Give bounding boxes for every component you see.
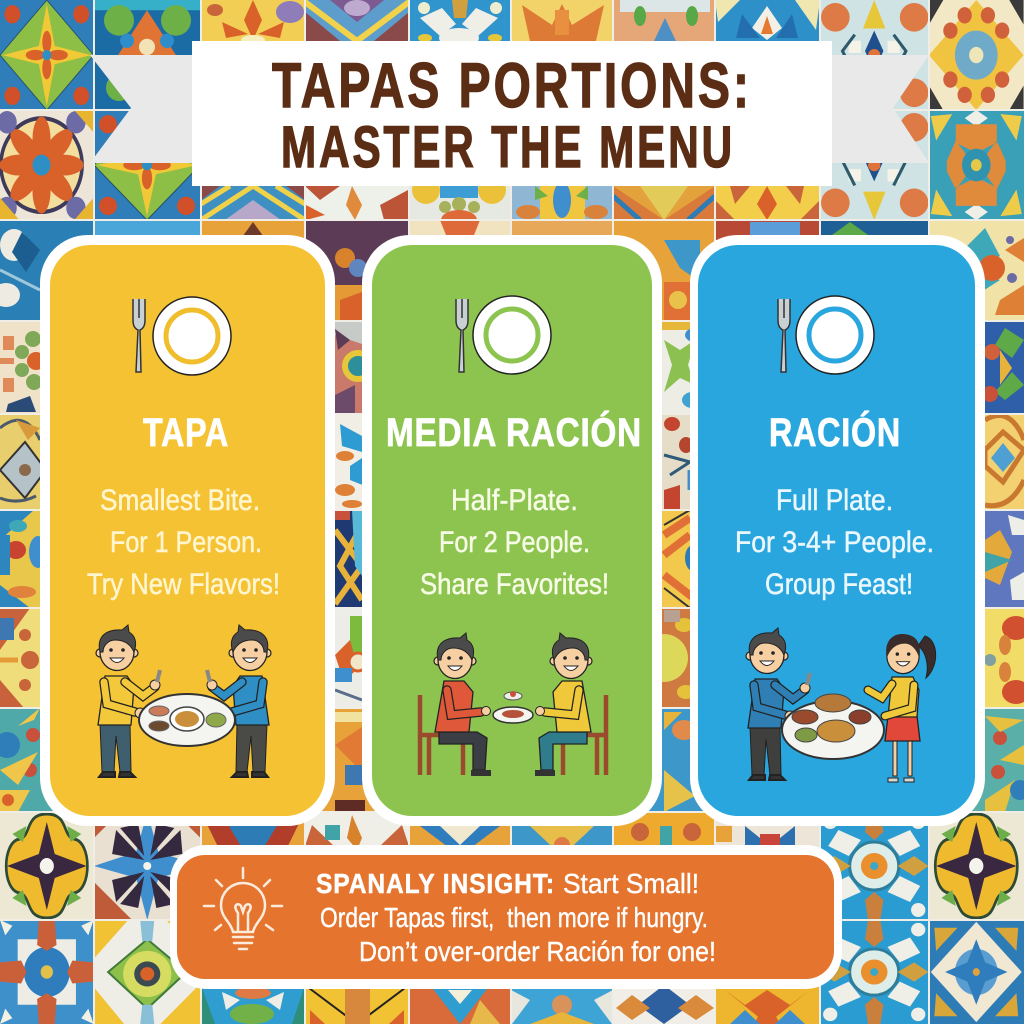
description: tapa: Smallest Bite. [100,484,260,517]
description: tapa [87,484,280,601]
panel: racion [690,235,985,826]
heading: racion: RACIÓN [769,409,901,455]
description: media racion: Half-Plate. [451,484,578,517]
icon: fork and plate [456,296,551,374]
panel: tapa [40,235,335,826]
description: tapa: Try New Flavors! [87,568,280,601]
description: racion: For 3-4+ People. [735,526,934,559]
illustration: two people seated sharing a half plate [420,633,606,776]
icon: fork and plate [778,296,874,374]
heading: tapa: TAPA [143,411,229,455]
callout: spanaly insight [170,845,842,989]
description: media racion [420,484,609,601]
panel: media racion [362,235,662,826]
banner ribbon left [90,55,192,163]
insight text [316,868,716,967]
description: media racion: For 2 People. [439,526,590,559]
description: racion: Full Plate. [776,484,893,517]
description: racion: Group Feast! [765,568,913,601]
icon: fork and plate [133,297,231,375]
illustration: two people sharing a tapa plate [96,625,271,777]
title line 2: MASTER THE MENU [281,115,735,180]
insight text: Start Small! [563,868,699,899]
insight text: Order Tapas first, then more if hungry. [320,902,708,933]
heading: media racion: MEDIA RACIÓN [386,409,642,455]
description: media racion: Share Favorites! [420,568,609,601]
insight text: SPANALY INSIGHT: [316,868,555,899]
banner ribbon right [832,55,929,163]
insight text: Don’t over-order Ración for one! [359,936,716,967]
icon: light bulb [204,868,282,949]
title line 1: TAPAS PORTIONS: [272,51,752,121]
illustration: man and woman sharing a full plate [746,628,936,782]
title banner [192,41,832,186]
description: racion [735,484,934,601]
description: tapa: For 1 Person. [110,526,262,559]
